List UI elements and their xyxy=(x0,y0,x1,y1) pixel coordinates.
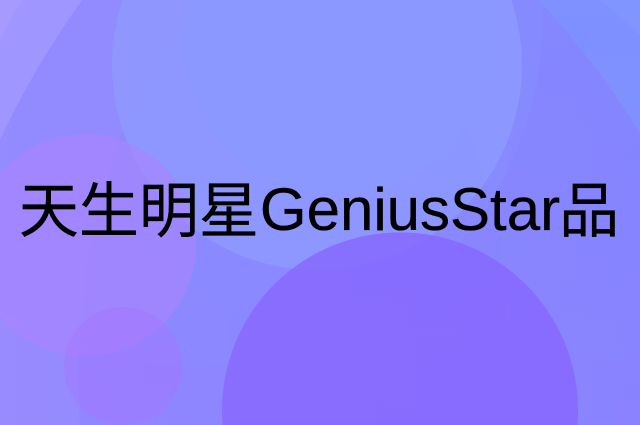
title: 天生明星GeniusStar品 xyxy=(19,176,619,245)
